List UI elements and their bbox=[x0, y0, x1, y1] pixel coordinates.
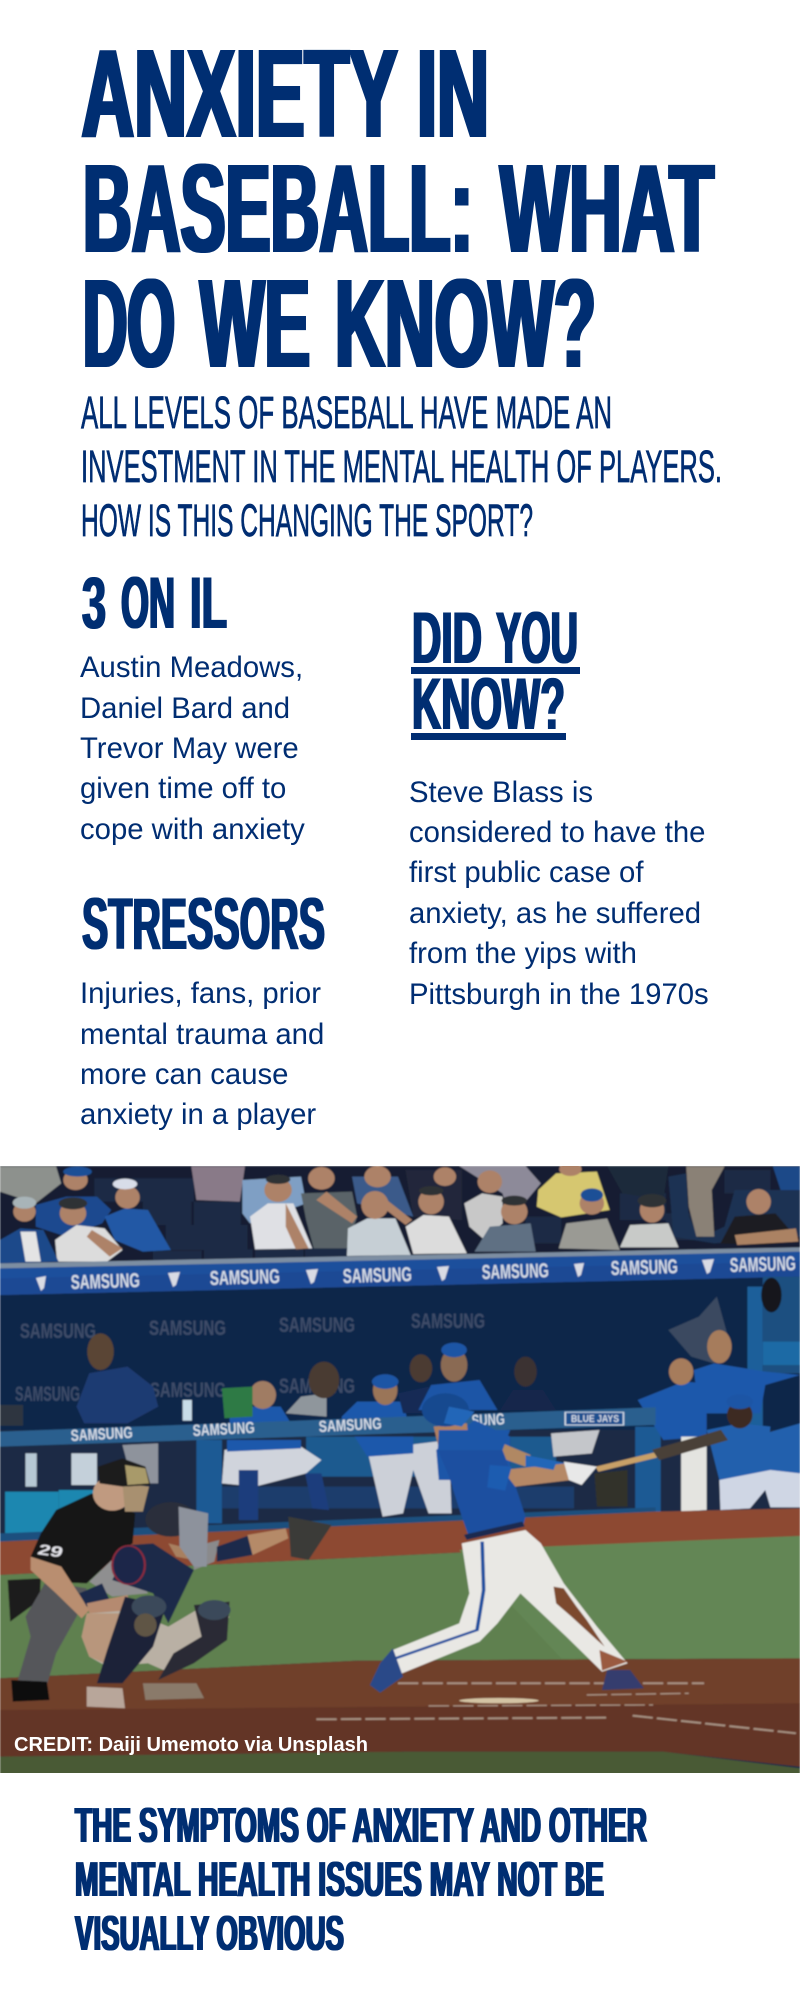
text: did you know body: considered to have the bbox=[409, 816, 705, 849]
dugout interior: SAMSUNG bbox=[411, 1310, 485, 1333]
heading: stressors: STRESSORS bbox=[82, 884, 325, 965]
title: WE bbox=[200, 253, 310, 394]
blue Samsung banner: SAMSUNG bbox=[342, 1264, 412, 1288]
dugout rail: SAMSUNG bbox=[70, 1425, 133, 1445]
panel: stressors bbox=[80, 884, 325, 1131]
blue Samsung banner: SAMSUNG bbox=[610, 1256, 678, 1280]
title: KNOW? bbox=[335, 253, 596, 394]
dugout interior: SAMSUNG bbox=[149, 1317, 226, 1340]
text: stressors body bbox=[80, 977, 324, 1131]
dugout interior: SAMSUNG bbox=[279, 1314, 355, 1337]
heading: did you know: YOU bbox=[496, 598, 578, 679]
text: did you know body: Steve Blass is bbox=[409, 776, 593, 809]
panel: 3 on IL bbox=[80, 563, 305, 846]
batter bbox=[370, 1393, 724, 1693]
lower dugout and bench players bbox=[0, 1330, 800, 1537]
heading: did you know: DID bbox=[412, 598, 482, 679]
heading: did you know bbox=[411, 598, 580, 745]
blue Samsung banner: SAMSUNG bbox=[70, 1270, 140, 1294]
stands and crowd bbox=[0, 1163, 800, 1266]
text: 3 on IL body: Austin Meadows, bbox=[80, 651, 303, 684]
subtitle bbox=[81, 387, 722, 546]
text: 3 on IL body: Trevor May were bbox=[80, 732, 299, 765]
closing statement bbox=[75, 1798, 647, 1961]
dugout rail: SAMSUNG bbox=[318, 1416, 382, 1436]
text: stressors body: mental trauma and bbox=[80, 1018, 324, 1051]
blue Samsung banner bbox=[0, 1247, 800, 1295]
dugout rail: SUNG bbox=[471, 1411, 505, 1430]
umpire bbox=[8, 1458, 151, 1702]
heading: 3 on IL: ON bbox=[121, 563, 175, 644]
text: stressors body: anxiety in a player bbox=[80, 1098, 316, 1131]
dugout interior: SAMSUNG bbox=[20, 1320, 96, 1343]
dugout interior: SAMSUNG bbox=[279, 1375, 355, 1398]
catcher bbox=[79, 1502, 332, 1708]
title: IN bbox=[417, 23, 489, 164]
text: 3 on IL body: cope with anxiety bbox=[80, 813, 305, 846]
photo credit: CREDIT: Daiji Umemoto via Unsplash bbox=[14, 1734, 368, 1756]
blue Samsung banner: SAMSUNG bbox=[481, 1260, 549, 1284]
title: ANXIETY bbox=[82, 23, 397, 164]
text: did you know body: anxiety, as he suffered bbox=[409, 897, 701, 930]
dugout rail: SAMSUNG bbox=[192, 1420, 255, 1440]
closing statement: VISUALLY OBVIOUS bbox=[75, 1906, 344, 1961]
dugout interior bbox=[15, 1277, 800, 1427]
text: 3 on IL body: given time off to bbox=[80, 772, 286, 805]
field: track, grass, infield dirt, outfield strip bbox=[0, 1507, 800, 1775]
text: stressors body: more can cause bbox=[80, 1058, 288, 1091]
text: did you know body: Pittsburgh in the 1970s bbox=[409, 978, 709, 1011]
heading: 3 on IL: IL bbox=[190, 563, 227, 644]
text: 3 on IL body: Daniel Bard and bbox=[80, 692, 290, 725]
text: 3 on IL body bbox=[80, 651, 305, 846]
panel: did you know bbox=[409, 598, 709, 1011]
dugout rail bbox=[0, 1407, 656, 1447]
title: DO bbox=[83, 253, 175, 394]
umpire: 29 bbox=[36, 1542, 65, 1561]
text: stressors body: Injuries, fans, prior bbox=[80, 977, 321, 1010]
dugout interior: SAMSUNG bbox=[150, 1379, 226, 1402]
text: did you know body bbox=[409, 776, 709, 1011]
title bbox=[82, 23, 714, 394]
heading: did you know: KNOW? bbox=[412, 664, 565, 745]
photo: batter swinging in front of dugout bbox=[0, 1163, 800, 1775]
dugout rail: BLUE JAYS bbox=[571, 1414, 619, 1425]
text: did you know body: first public case of bbox=[409, 856, 644, 889]
text: did you know body: from the yips with bbox=[409, 937, 637, 970]
heading: 3 on IL: 3 bbox=[82, 563, 106, 644]
blue Samsung banner: SAMSUNG bbox=[209, 1266, 280, 1290]
title: BASEBALL: bbox=[83, 138, 473, 279]
dugout players bbox=[0, 1333, 556, 1427]
dugout interior: SAMSUNG bbox=[15, 1383, 80, 1406]
